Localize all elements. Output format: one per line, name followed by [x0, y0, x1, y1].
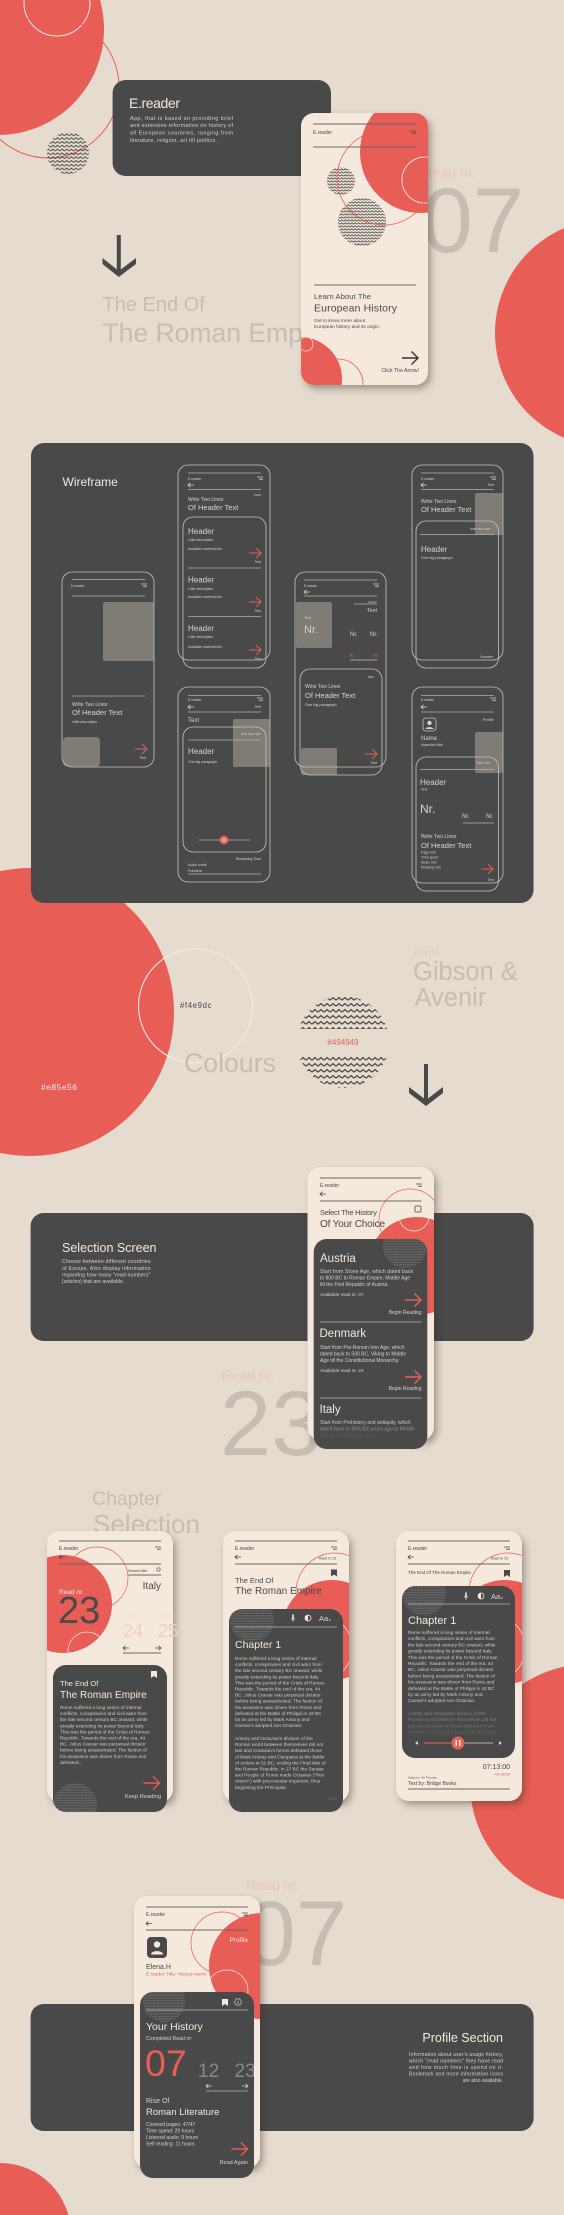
- phone: audio player: E.reader: [408, 1546, 428, 1552]
- phone: chapter select: This was the period of the Crisis of Roman: [60, 1729, 150, 1735]
- wireframe: profile: Name: [421, 736, 438, 742]
- phone: profile: 07: [145, 2042, 187, 2084]
- phone: audio player: Text by: Bridge Books: [408, 1781, 457, 1787]
- wireframe: profile: Nr.: [486, 814, 494, 820]
- colours section: #e85e56: [41, 1082, 77, 1092]
- colours section: Colours: [184, 1048, 276, 1078]
- wireframe: chapter selection: Search: [368, 600, 377, 604]
- panel: selection screen: (articles) that are available.: [62, 1279, 124, 1285]
- phone: audio player: before being assassinated. The faction of: [408, 1673, 495, 1679]
- phone: audio player: Republic. Towards the end of the era, 44: [408, 1661, 494, 1667]
- phone: chapter reader: Caesar's adopted son Octavian.: [235, 1723, 302, 1729]
- phone: profile: 23: [234, 2061, 256, 2082]
- phone: profile: Listened audio: 9 hours: [146, 2135, 198, 2141]
- phone: welcome screen: European history and its origin.: [314, 324, 380, 330]
- wireframe: chapter selection: E.reader: [304, 584, 318, 588]
- heading: chapter selection: Chapter: [92, 1488, 162, 1510]
- ghost number: read nr 23: Read nr.: [222, 1367, 275, 1383]
- phone: audio player: Audio by: Sir Thomas: [408, 1776, 437, 1780]
- wireframe: profile: Nr.: [420, 802, 435, 816]
- phone: profile: Profile: [230, 1937, 248, 1944]
- panel: profile section: and how much time is spend on it.: [409, 2065, 503, 2071]
- phone: audio player: Read nr. 23: [491, 1556, 508, 1560]
- wireframe: reader with audio: Remaining Time: [236, 857, 261, 861]
- arrow down: [409, 1064, 443, 1106]
- phone: selection list: Italy: [320, 1404, 341, 1416]
- panel: profile section: are also available.: [463, 2078, 503, 2084]
- wireframe: chapter selection: Icon: [368, 675, 374, 679]
- phone: chapter select: E.reader: [59, 1546, 79, 1552]
- phone: chapter reader: defeated at the Battle of Philippi in 42 BC: [235, 1711, 322, 1717]
- phone: audio player: his assassins was driven from Rome and: [408, 1680, 495, 1686]
- wireframe: welcome: E.reader: [71, 584, 85, 588]
- ghost number: read nr 07: 07: [245, 1883, 347, 1985]
- wireframe: welcome: [62, 572, 154, 767]
- wireframe: reader with audio: Header: [188, 747, 215, 756]
- ghost number: read nr 07: Read nr.: [423, 164, 476, 180]
- phone: profile: Read Again: [220, 2160, 248, 2166]
- phone: chapter reader: Antony and Octavian's division of the: [235, 1736, 313, 1742]
- phone: chapter select: Republic. Towards the end of the era, 44: [60, 1736, 146, 1742]
- phone: chapter select: defeated...: [60, 1760, 82, 1766]
- wireframe: selection list: Little description: [188, 538, 213, 542]
- wireframe: chapter text: Of Header Text: [421, 505, 472, 514]
- phone: selection list: till the First Republic of Austria.: [320, 1282, 389, 1288]
- phone: profile: Covered pages: 47/47: [146, 2122, 195, 2128]
- phone: chapter reader: his assassins was driven from Rome and: [235, 1705, 322, 1711]
- wireframe: profile: Header: [420, 778, 447, 787]
- heading: The End Of The Roman Empire: [102, 294, 332, 348]
- phone: chapter select: 25: [158, 1621, 178, 1641]
- phone: profile: 12: [198, 2061, 219, 2082]
- phone: welcome screen: Get to know more about: [314, 318, 366, 324]
- phone: selection list: Start from Pre-Roman Iron Age, which: [320, 1345, 405, 1351]
- wireframe: profile: Text: [488, 878, 494, 882]
- wireframe: reader with audio: [178, 687, 270, 882]
- phone: profile: Rise Of: [146, 2098, 169, 2105]
- wireframe: chapter selection: Text: [371, 761, 377, 765]
- phone: chapter select: greatly extending its power beyond Italy.: [60, 1723, 144, 1729]
- decoration: lower right circle: [470, 1664, 564, 1902]
- wireframe: chapter text: One big paragraph: [421, 556, 453, 560]
- wireframe: chapter selection: Nr.: [304, 624, 318, 636]
- wireframe: profile: [412, 687, 503, 891]
- wireframe: reader with audio: Icon Icon Icon: [241, 732, 261, 736]
- panel: E.reader intro: all European countries, ranging from: [130, 130, 234, 136]
- wireframe: chapter selection: Text: [367, 608, 377, 614]
- wireframe: profile: Profile: [483, 717, 495, 722]
- heading: The End Of The Roman Empire: The End Of: [102, 294, 205, 316]
- phone: profile: E.reader: [146, 1912, 166, 1918]
- wireframe: profile: Write Two Lines: [421, 834, 457, 840]
- phone: audio player: The End Of The Roman Empire: [408, 1570, 471, 1575]
- wireframe: profile: Text: [421, 788, 427, 792]
- panel: E.reader intro: and extensive information on history of: [130, 123, 234, 129]
- phone: audio player: -06:48:00: [494, 1772, 510, 1776]
- wireframe: profile: Awarded title: [421, 743, 443, 747]
- panel: wireframe: Wireframe: [62, 475, 118, 489]
- wireframe: selection list: Of Header Text: [188, 503, 239, 512]
- phone: chapter reader: Read nr. 23: [319, 1556, 336, 1560]
- phone: chapter reader: This was the period of the Crisis of Roman: [235, 1680, 325, 1686]
- phone: chapter reader: greatly extending its power beyond Italy.: [235, 1674, 319, 1680]
- fonts note: [413, 947, 518, 1012]
- heading: The End Of The Roman Empire: The Roman Empire: [102, 318, 332, 348]
- phone: chapter reader: Republic. Towards the end of the era, 44: [235, 1686, 321, 1692]
- phone: chapter reader: Chapter 1: [235, 1639, 281, 1651]
- wireframe: chapter text: Header: [421, 545, 448, 554]
- phone: chapter reader: and People of Rome made Octavian ("first: [235, 1773, 324, 1779]
- wireframe: selection list: Available material info: [188, 595, 222, 599]
- wireframe: selection list: Header: [188, 527, 215, 536]
- phone: welcome screen: European History: [314, 302, 398, 314]
- panel: E.reader intro: [113, 80, 331, 176]
- wireframe: selection list: Available material info: [188, 645, 222, 649]
- phone: audio player: This was the period of the Crisis of Roman: [408, 1655, 498, 1661]
- phone: audio player: conflicts, conspiracies and civil wars from: [408, 1636, 495, 1642]
- ghost number: read nr 23: 23: [220, 1373, 322, 1475]
- wireframe: selection list: Text: [255, 609, 261, 613]
- phone: chapter reader: beginning the Principate.: [235, 1785, 287, 1791]
- phone: selection list: E.reader: [320, 1183, 340, 1189]
- phone: chapter reader: of Actium in 31 BC, ending the Final War of: [235, 1760, 326, 1766]
- wireframe: welcome: Text: [140, 756, 146, 760]
- panel: selection screen: regarding how many "read numbers": [62, 1272, 151, 1278]
- wireframe: reader with audio: Text: [188, 718, 199, 724]
- wireframe: selection list: Header: [188, 576, 215, 584]
- wireframe: profile: Page info: [421, 850, 436, 854]
- wireframe: selection list: Text: [255, 560, 261, 564]
- phone: selection list: Start from Prehistory and antiquity, which: [320, 1420, 411, 1426]
- phone: audio player: last and Octavian's forces defeated those: [408, 1723, 495, 1729]
- fonts note: Avenir: [414, 984, 487, 1012]
- phone: selection list: Start from Stone Age, which dated back: [320, 1269, 414, 1275]
- phone: chapter reader: by an army led by Mark Antony and: [235, 1717, 310, 1723]
- panel: wireframe: [31, 443, 534, 903]
- panel: selection screen: of Europe. Also display information: [62, 1266, 151, 1272]
- phone: selection list: Available read nr. 24: [320, 1368, 364, 1374]
- decoration: top left circles: [0, 0, 119, 174]
- wireframe: chapter selection: Of Header Text: [305, 691, 356, 700]
- phone: profile: Self reading: 11 hours: [146, 2142, 195, 2148]
- phone: chapter select: 23: [58, 1590, 100, 1632]
- wireframe: selection list: Icon: [254, 493, 261, 497]
- wireframe: chapter text: E.reader: [421, 477, 435, 481]
- phone: audio player: defeated at the Battle of Philippi in 42 BC: [408, 1686, 495, 1692]
- phone: chapter reader: conflicts, conspiracies and civil wars from: [235, 1662, 322, 1668]
- phone: selection list: [306, 1166, 442, 1449]
- heading: chapter selection: Selection: [93, 1509, 200, 1539]
- phone: audio player: Antony and Octavian's division of the: [408, 1711, 486, 1717]
- phone: chapter select: Keep Reading: [125, 1794, 161, 1800]
- wireframe: selection list: Little description: [188, 587, 213, 591]
- wireframe: welcome: Write Two Lines: [72, 702, 108, 708]
- phone: chapter reader: of Mark Antony and Cleopatra at the Battle: [235, 1754, 325, 1760]
- phone: chapter select: BC, Julius Caesar was perpetual dictator: [60, 1742, 146, 1748]
- phone: selection list: Available read nr. 37: [320, 1292, 364, 1298]
- phone: chapter reader: before being assassinated. The faction of: [235, 1699, 322, 1705]
- phone: audio player: Rome suffered a long series of internal: [408, 1630, 490, 1636]
- colours section: #494949: [327, 1038, 359, 1047]
- decoration: colours red circle: [0, 868, 174, 1156]
- phone: chapter select: 24: [123, 1621, 143, 1641]
- wireframe: chapter text: Number: [481, 655, 494, 659]
- heading: chapter selection: [92, 1488, 200, 1539]
- phone: audio player: Roman world between themselves did not: [408, 1717, 497, 1723]
- phone: profile: Elena.H: [146, 1964, 171, 1971]
- panel: E.reader intro: literature, religion, art till politics.: [130, 138, 217, 144]
- wireframe: profile: Reading info: [421, 866, 441, 870]
- phone: chapter reader: the late second century BC onward, while: [235, 1668, 323, 1674]
- phone: chapter select: his assassins was driven from Rome and: [60, 1754, 147, 1760]
- phone: profile: Your History: [146, 2021, 204, 2033]
- phone: selection list: Select The History: [320, 1208, 377, 1217]
- wireframe: reader with audio: Publisher: [188, 869, 203, 873]
- fonts note: Gibson &: [413, 958, 518, 986]
- phone: selection list: Of Your Choice: [320, 1219, 385, 1230]
- colours section: [41, 949, 389, 1092]
- phone: chapter select: Read nr.: [59, 1589, 84, 1596]
- wireframe: selection list: Available material info: [188, 547, 222, 551]
- phone: chapter reader: The End Of: [235, 1576, 274, 1585]
- phone: chapter reader: Aa: [319, 1614, 329, 1623]
- wireframe: chapter text: Icon Icon Icon: [470, 527, 490, 531]
- phone: chapter reader: citizen") with proconsular imperium, thus: [235, 1779, 321, 1785]
- wireframe: profile: Of Header Text: [421, 841, 472, 850]
- wireframe: reader with audio: One big paragraph: [188, 760, 217, 764]
- wireframe: profile: Icon Icon: [477, 761, 490, 765]
- panel: selection screen: Choose between different countries: [62, 1259, 151, 1265]
- phone: selection list: dated back to 850,000 years ago to Middle: [320, 1426, 415, 1432]
- phone: profile: Completed Read nr:: [146, 2036, 192, 2042]
- phone: welcome screen: [300, 112, 436, 394]
- wireframe: welcome: Little description: [72, 720, 97, 724]
- phone: selection list: to 800 BC to Roman Empire, Middle Age: [320, 1276, 410, 1282]
- phone: audio player: by an army led by Mark Antony and: [408, 1692, 483, 1698]
- phone: chapter reader: the Roman Republic. In 27 BC the Senate: [235, 1766, 324, 1772]
- phone: audio player: BC, Julius Caesar was perpetual dictator: [408, 1667, 494, 1673]
- phone: profile: E.reader Title: History-worm: [146, 1972, 206, 1976]
- panel: E.reader intro: E.reader: [129, 95, 180, 111]
- wireframe: welcome: Of Header Text: [72, 708, 123, 717]
- wireframe: selection list: Write Two Lines: [188, 497, 224, 503]
- wireframe: selection list: [178, 465, 270, 668]
- phone: welcome screen: Learn About The: [314, 292, 371, 301]
- phone: selection list: Begin Reading: [389, 1310, 422, 1316]
- ghost number: read nr 07: 07: [422, 170, 524, 272]
- panel: profile section: Bookmark and more information icons: [409, 2072, 504, 2078]
- wireframe: chapter selection: One big paragraph: [305, 703, 337, 707]
- phone: chapter select: Rome suffered a long series of internal: [60, 1705, 142, 1711]
- decoration: right red circle: [495, 219, 564, 447]
- phone: profile: [132, 1896, 268, 2178]
- wireframe: chapter selection: Write Two Lines: [305, 684, 341, 690]
- wireframe: selection list: Header: [188, 624, 215, 633]
- phone: chapter reader: BC, Julius Caesar was perpetual dictator: [235, 1693, 321, 1699]
- phone: selection list: Age till the Republic era: [320, 1433, 373, 1439]
- wireframe: chapter text: Write Two Lines: [421, 499, 457, 505]
- phone: chapter reader: last and Octavian's forces defeated those: [235, 1748, 322, 1754]
- phone: selection list: Age till the Constitutional Monarchy.: [320, 1358, 399, 1364]
- colours section: #f4e9dc: [180, 1001, 212, 1010]
- phone: audio player: Chapter 1: [408, 1615, 456, 1627]
- phone: audio player: Aa: [491, 1592, 501, 1601]
- phone: welcome screen: Click The Arrow!: [381, 368, 419, 374]
- phone: chapter reader: Rome suffered a long series of internal: [235, 1656, 316, 1662]
- phone: chapter reader: Roman world between themselves did not: [235, 1742, 324, 1748]
- phone: chapter select: The Roman Empire: [60, 1690, 147, 1701]
- phone: profile: Roman Literature: [146, 2107, 219, 2118]
- phone: audio player: the late second century BC onward, while: [408, 1642, 496, 1648]
- phone: chapter reader: [222, 1530, 356, 1812]
- phone: chapter select: Search title: [128, 1569, 147, 1573]
- wireframe: selection list: Text: [255, 657, 261, 661]
- wireframe: profile: Time spent: [421, 856, 438, 860]
- phone: selection list: dated back to 500 BC, Viking to Middle: [320, 1352, 406, 1358]
- wireframe: chapter text: [412, 465, 503, 668]
- phone: chapter reader: E.reader: [235, 1546, 255, 1552]
- phone: audio player: [394, 1530, 530, 1810]
- phone: audio player: 07:13:00: [483, 1764, 510, 1771]
- panel: selection screen: Selection Screen: [62, 1241, 157, 1255]
- phone: audio player: of Mark Antony and Cleopatra at the Battle: [408, 1730, 498, 1736]
- phone: chapter reader: The Roman Empire: [235, 1586, 322, 1597]
- phone: chapter reader: 1/20: [328, 1796, 337, 1801]
- phone: chapter select: the late second century BC onward, while: [60, 1717, 148, 1723]
- phone: chapter select: before being assassinated. The faction of: [60, 1748, 147, 1754]
- wireframe: profile: Audio info: [421, 860, 437, 864]
- phone: chapter select: The End Of: [60, 1679, 99, 1688]
- wireframe: profile: E.reader: [421, 698, 435, 702]
- wireframe: chapter selection: Nr.: [370, 632, 378, 638]
- phone: audio player: Caesar's adopted son Octavian.: [408, 1698, 475, 1704]
- panel: selection screen: [31, 1213, 534, 1341]
- wireframe: chapter selection: Nr.: [350, 632, 358, 638]
- wireframe: selection list: Little description: [188, 635, 213, 639]
- ghost number: read nr 07: Read nr.: [246, 1877, 299, 1893]
- phone: selection list: Austria: [320, 1253, 356, 1265]
- phone: chapter select: Italy: [143, 1581, 161, 1592]
- phone: selection list: Denmark: [320, 1328, 366, 1340]
- phone: chapter select: conflicts, conspiracies and civil wars from: [60, 1711, 147, 1717]
- wireframe: chapter selection: [295, 572, 386, 775]
- phone: selection list: Begin Reading: [389, 1386, 422, 1392]
- decoration: bottom left circle: [0, 2163, 71, 2215]
- arrow down: [102, 235, 136, 277]
- panel: profile section: which "read numbers" they have read: [409, 2058, 503, 2064]
- wireframe: profile: Nr.: [462, 814, 470, 820]
- phone: welcome screen: E.reader: [313, 130, 333, 136]
- panel: profile section: Information about user's usage history,: [409, 2052, 503, 2058]
- wireframe: reader with audio: Text: [255, 705, 261, 709]
- phone: profile: Time spend: 20 hours: [146, 2128, 195, 2134]
- wireframe: reader with audio: E.reader: [188, 698, 202, 702]
- panel: E.reader intro: App, that is based on providing brief: [130, 116, 234, 122]
- phone: audio player: greatly extending its power beyond Italy.: [408, 1649, 492, 1655]
- wireframe: chapter selection: Text: [304, 615, 312, 620]
- panel: profile section: [31, 2004, 534, 2131]
- panel: profile section: Profile Section: [422, 2031, 503, 2045]
- phone: chapter select: [46, 1530, 180, 1812]
- wireframe: reader with audio: Audio credit: [188, 863, 207, 867]
- wireframe: selection list: E.reader: [188, 477, 202, 481]
- wireframe: chapter text: Text: [488, 483, 494, 487]
- fonts note: Fonts..: [413, 947, 445, 959]
